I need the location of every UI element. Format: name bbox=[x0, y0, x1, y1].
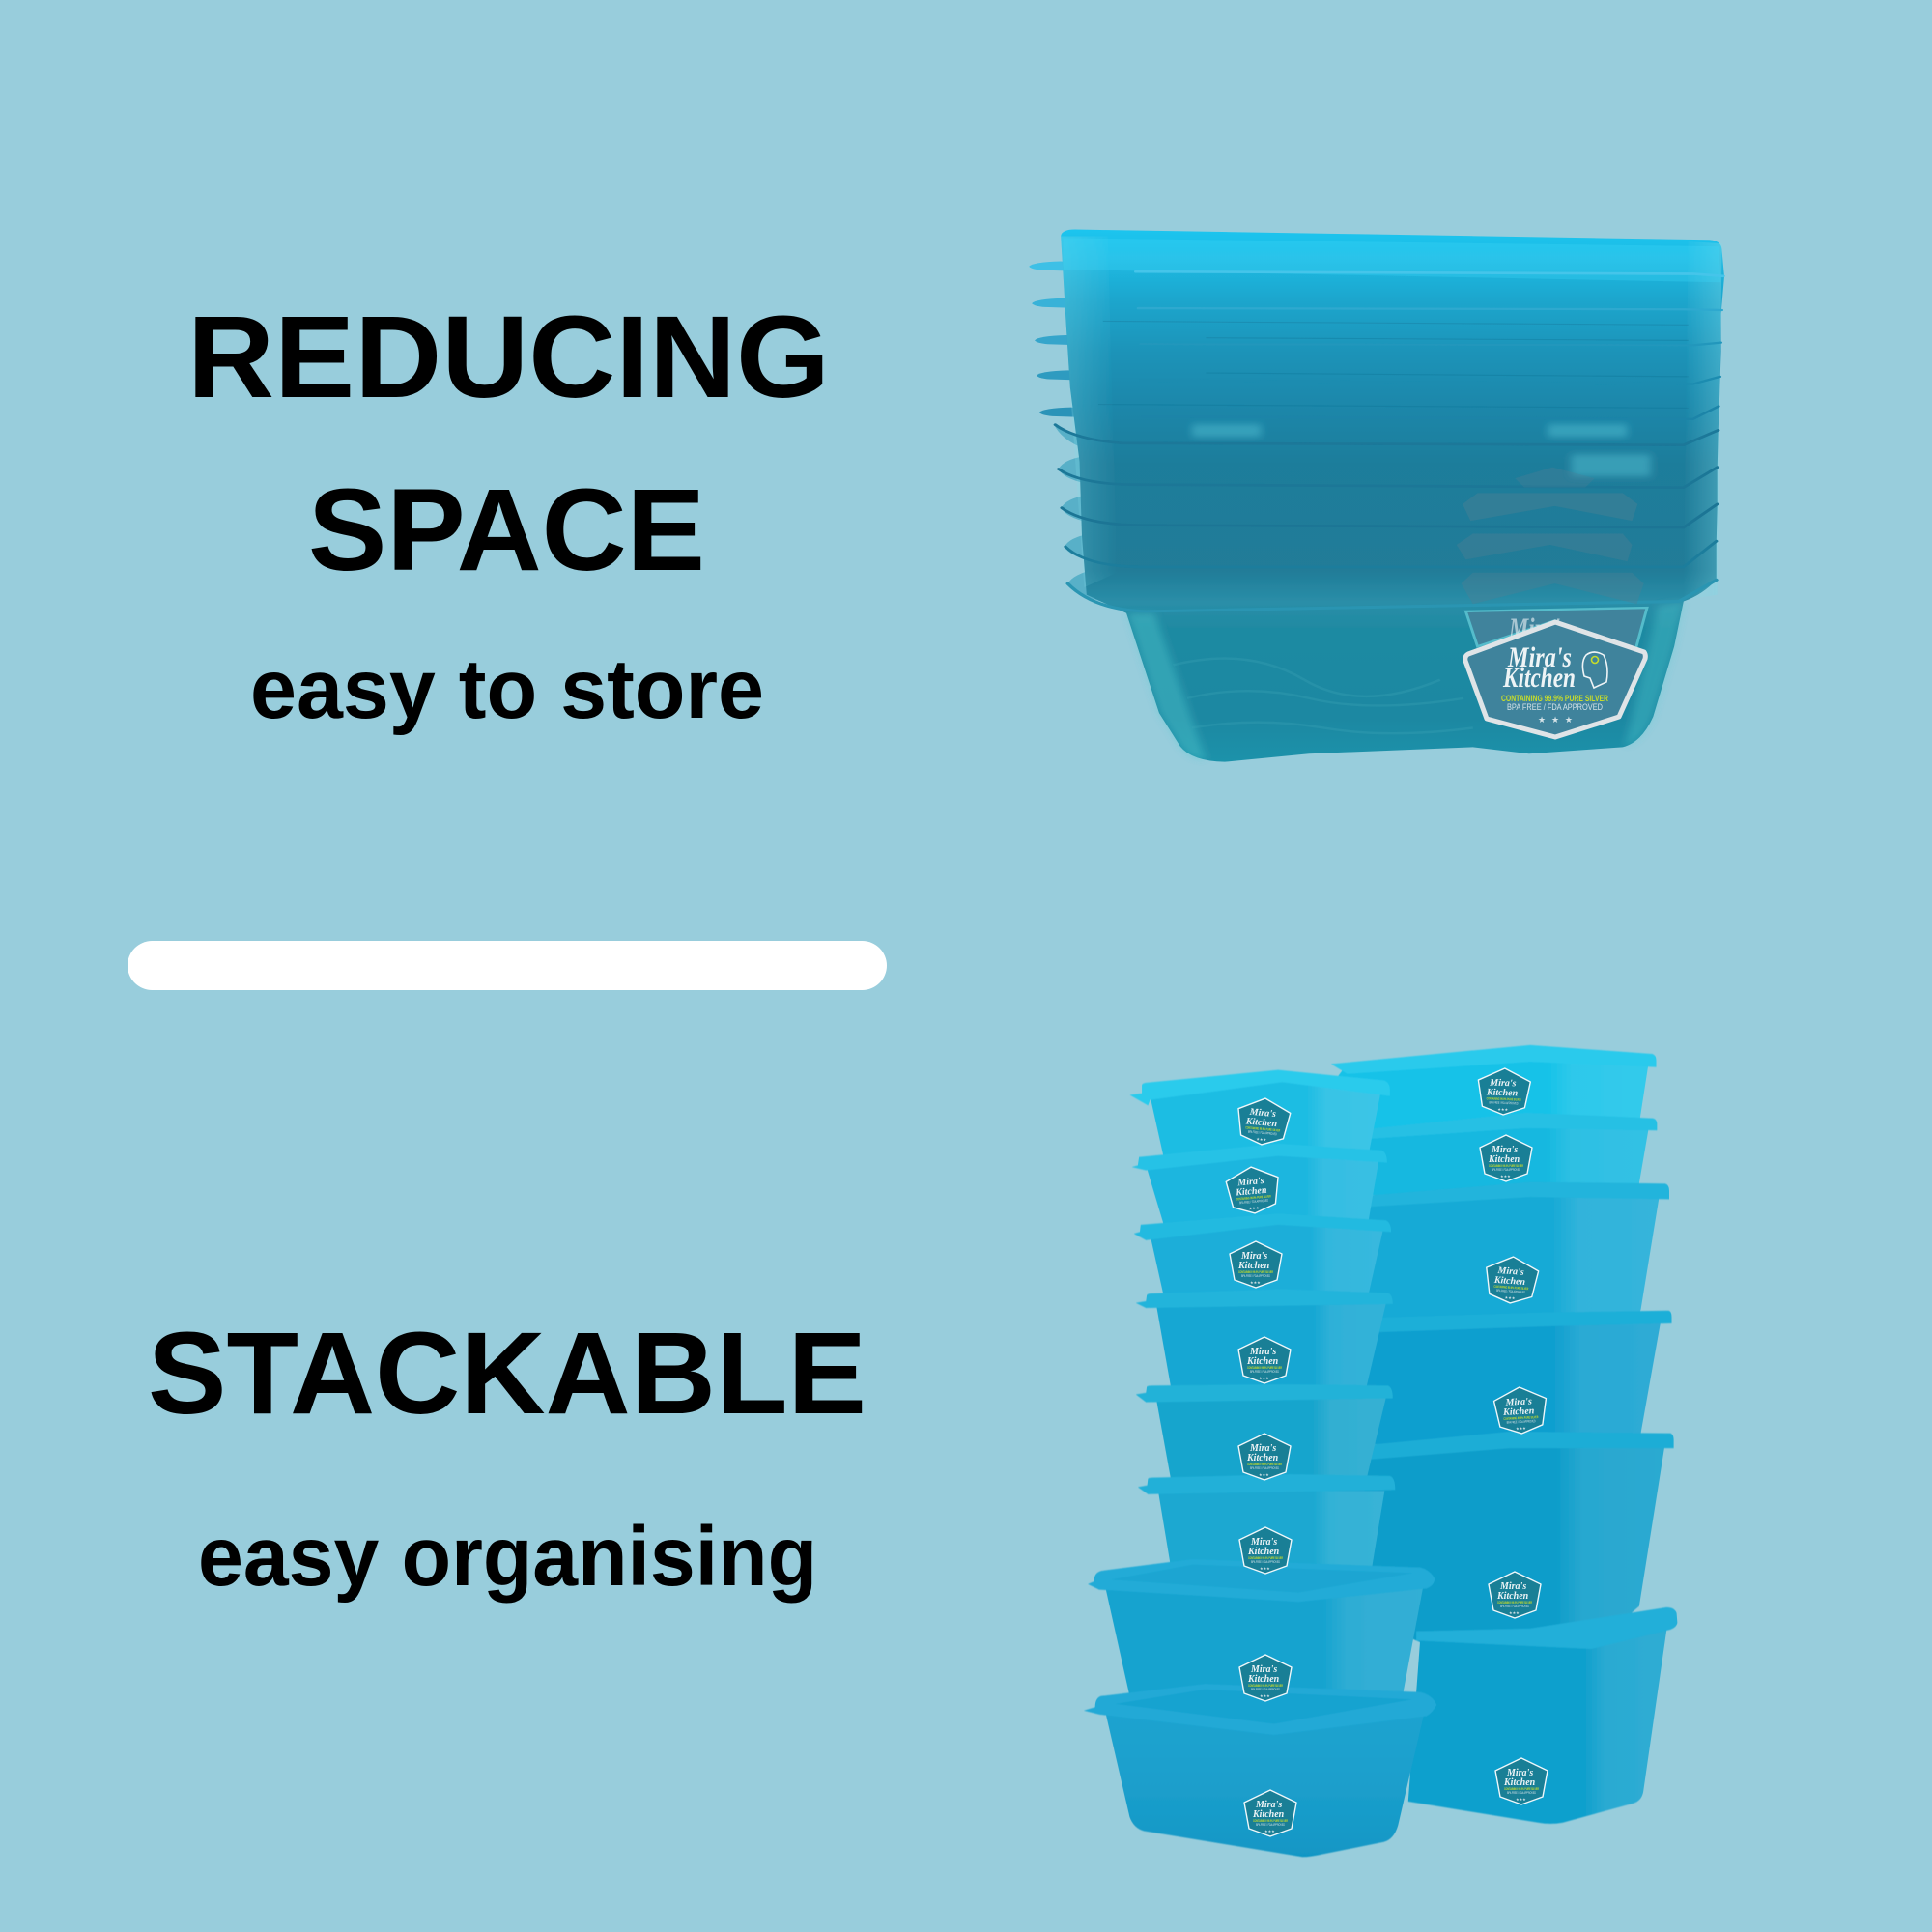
subheading: easy organising: easy organising bbox=[198, 1510, 817, 1604]
label L2: BPA FREE / FDA APPROVED bbox=[1239, 1199, 1269, 1205]
left light edge bbox=[1061, 236, 1117, 587]
label L1: Mira's bbox=[1248, 1107, 1276, 1120]
white divider pill bbox=[128, 941, 887, 990]
right column box 4 bbox=[1322, 1311, 1672, 1445]
label R6: Mira's bbox=[1506, 1768, 1533, 1778]
label L6: BPA FREE / FDA APPROVED bbox=[1251, 1560, 1280, 1564]
label L2: Kitchen bbox=[1235, 1185, 1267, 1199]
label L7: ★★★ bbox=[1260, 1693, 1270, 1698]
lid seams bbox=[1098, 321, 1689, 408]
label L2: CONTAINING 99.9% PURE SILVER bbox=[1236, 1194, 1271, 1202]
label L7: BPA FREE / FDA APPROVED bbox=[1251, 1688, 1280, 1691]
label L7 bbox=[1239, 1655, 1292, 1701]
label R4 bbox=[1493, 1386, 1548, 1435]
right column box 3 bbox=[1322, 1182, 1669, 1321]
left column box 4 bbox=[1136, 1289, 1393, 1391]
label R6 bbox=[1495, 1758, 1548, 1804]
ghost label text: Mira's bbox=[1508, 612, 1569, 644]
inner window highlights bbox=[1192, 424, 1651, 476]
label L5: ★★★ bbox=[1259, 1472, 1269, 1477]
right column box 2 bbox=[1322, 1113, 1657, 1196]
label R1: BPA FREE / FDA APPROVED bbox=[1489, 1100, 1519, 1106]
label L1: ★★★ bbox=[1256, 1136, 1267, 1142]
left column box 7 bbox=[1088, 1559, 1435, 1709]
front product label: ★ ★ ★ bbox=[1538, 715, 1573, 724]
product photo: stacked containers bbox=[1084, 1045, 1677, 1857]
heading: stackable: STACKABLE bbox=[148, 1307, 867, 1438]
label R6: BPA FREE / FDA APPROVED bbox=[1507, 1791, 1536, 1795]
label L5: Mira's bbox=[1249, 1443, 1276, 1454]
label L7: Mira's bbox=[1250, 1664, 1277, 1675]
left column box 3 bbox=[1134, 1213, 1391, 1298]
label L3: CONTAINING 99.9% PURE SILVER bbox=[1238, 1270, 1273, 1274]
label L6: CONTAINING 99.9% PURE SILVER bbox=[1248, 1556, 1283, 1560]
heading: reducing space: SPACE bbox=[308, 464, 705, 595]
label R3: BPA FREE / FDA APPROVED bbox=[1496, 1289, 1525, 1294]
wavy base folds bbox=[1173, 659, 1473, 733]
label L6: Kitchen bbox=[1247, 1547, 1280, 1557]
right light edge bbox=[1684, 242, 1722, 600]
label R5: BPA FREE / FDA APPROVED bbox=[1500, 1605, 1529, 1608]
label L8: Mira's bbox=[1255, 1800, 1282, 1810]
label L4: CONTAINING 99.9% PURE SILVER bbox=[1247, 1366, 1282, 1370]
label L3: Mira's bbox=[1240, 1251, 1267, 1262]
label R1: ★★★ bbox=[1497, 1107, 1509, 1112]
label R4: BPA FREE / FDA APPROVED bbox=[1507, 1419, 1536, 1425]
label L2: Mira's bbox=[1236, 1176, 1264, 1188]
label R3: Mira's bbox=[1496, 1265, 1524, 1278]
label L4: ★★★ bbox=[1259, 1376, 1269, 1380]
label R5: Mira's bbox=[1499, 1581, 1526, 1592]
left column box 1 bbox=[1129, 1070, 1390, 1160]
label L3: Kitchen bbox=[1237, 1261, 1270, 1271]
tabs on upper lids bbox=[1029, 261, 1146, 419]
front product label: CONTAINING 99.9% PURE SILVER bbox=[1501, 694, 1608, 703]
label L6: ★★★ bbox=[1260, 1566, 1270, 1571]
label L2 bbox=[1225, 1165, 1281, 1215]
label L1 bbox=[1236, 1096, 1292, 1147]
label L7: CONTAINING 99.9% PURE SILVER bbox=[1248, 1684, 1283, 1688]
label L4: Kitchen bbox=[1246, 1356, 1279, 1367]
front product label: Kitchen bbox=[1502, 662, 1576, 694]
heading: reducing space bbox=[187, 291, 830, 595]
label R1 bbox=[1477, 1067, 1531, 1116]
left column box 8 bbox=[1084, 1684, 1436, 1857]
front product label: BPA FREE / FDA APPROVED bbox=[1507, 702, 1603, 712]
label R5: ★★★ bbox=[1509, 1610, 1520, 1615]
label L3 bbox=[1230, 1241, 1282, 1288]
label L4: Mira's bbox=[1249, 1347, 1276, 1357]
product photo: nested container stack bbox=[1029, 230, 1724, 762]
label L5: CONTAINING 99.9% PURE SILVER bbox=[1247, 1463, 1282, 1466]
right column box 5 bbox=[1322, 1432, 1674, 1648]
label L5: BPA FREE / FDA APPROVED bbox=[1250, 1466, 1279, 1470]
label R3: ★★★ bbox=[1504, 1295, 1516, 1300]
label L6 bbox=[1239, 1527, 1292, 1574]
label L8: CONTAINING 99.9% PURE SILVER bbox=[1253, 1819, 1288, 1823]
label L8: BPA FREE / FDA APPROVED bbox=[1256, 1823, 1285, 1827]
stack silhouette bbox=[1061, 230, 1724, 762]
rim lines bbox=[1055, 271, 1723, 611]
label R4: Kitchen bbox=[1502, 1406, 1535, 1418]
label R5 bbox=[1489, 1572, 1541, 1618]
label R4: CONTAINING 99.9% PURE SILVER bbox=[1503, 1415, 1539, 1421]
label R1: CONTAINING 99.9% PURE SILVER bbox=[1487, 1096, 1521, 1102]
label R2: CONTAINING 99.9% PURE SILVER bbox=[1489, 1164, 1523, 1168]
lower body left highlight bbox=[1127, 613, 1206, 759]
label L1: BPA FREE / FDA APPROVED bbox=[1248, 1130, 1277, 1136]
label R6: CONTAINING 99.9% PURE SILVER bbox=[1504, 1787, 1539, 1791]
label R6: Kitchen bbox=[1503, 1777, 1536, 1788]
label L3: BPA FREE / FDA APPROVED bbox=[1241, 1274, 1270, 1278]
label R1: Kitchen bbox=[1486, 1087, 1519, 1099]
label L1: Kitchen bbox=[1244, 1116, 1278, 1129]
heading: reducing space: REDUCING bbox=[187, 291, 830, 422]
label L8 bbox=[1244, 1790, 1296, 1836]
icon: logo head bbox=[1582, 652, 1607, 688]
left column box 2 bbox=[1132, 1144, 1387, 1227]
label R4: Mira's bbox=[1504, 1396, 1532, 1408]
lower body right highlight bbox=[1625, 602, 1684, 747]
left column box 6 bbox=[1138, 1474, 1395, 1581]
top lid highlight bbox=[1064, 238, 1721, 282]
ghost nested labels bbox=[1457, 468, 1647, 654]
front product label bbox=[1465, 622, 1645, 737]
label L1: CONTAINING 99.9% PURE SILVER bbox=[1245, 1125, 1281, 1133]
front product label: Mira's bbox=[1507, 641, 1572, 673]
label L4 bbox=[1238, 1337, 1291, 1383]
label R2: ★★★ bbox=[1500, 1174, 1511, 1179]
right column box 6 bbox=[1408, 1607, 1677, 1824]
right column box 1 bbox=[1322, 1045, 1657, 1129]
label L8: Kitchen bbox=[1252, 1809, 1285, 1820]
label R3: CONTAINING 99.9% PURE SILVER bbox=[1493, 1285, 1529, 1291]
label R2: BPA FREE / FDA APPROVED bbox=[1492, 1168, 1520, 1172]
label L7: Kitchen bbox=[1247, 1674, 1280, 1685]
label R6: ★★★ bbox=[1516, 1797, 1526, 1802]
subheading: easy to store: easy to store bbox=[250, 642, 764, 736]
label R5: Kitchen bbox=[1496, 1591, 1529, 1602]
label R3 bbox=[1484, 1255, 1540, 1305]
label R5: CONTAINING 99.9% PURE SILVER bbox=[1497, 1601, 1532, 1605]
label L8: ★★★ bbox=[1264, 1829, 1275, 1833]
label L2: ★★★ bbox=[1249, 1205, 1260, 1210]
label R4: ★★★ bbox=[1516, 1426, 1526, 1431]
rim lobes on lower lids bbox=[1054, 424, 1103, 602]
label R3: Kitchen bbox=[1492, 1275, 1526, 1288]
label R1: Mira's bbox=[1489, 1077, 1517, 1089]
label L5: Kitchen bbox=[1246, 1453, 1279, 1463]
label L6: Mira's bbox=[1250, 1537, 1277, 1548]
label R2: Kitchen bbox=[1488, 1154, 1520, 1165]
label L4: BPA FREE / FDA APPROVED bbox=[1250, 1370, 1279, 1374]
left column box 5 bbox=[1136, 1384, 1393, 1483]
label L5 bbox=[1238, 1434, 1291, 1480]
label R2: Mira's bbox=[1491, 1145, 1518, 1155]
label L3: ★★★ bbox=[1250, 1280, 1261, 1285]
label R2 bbox=[1480, 1135, 1532, 1181]
